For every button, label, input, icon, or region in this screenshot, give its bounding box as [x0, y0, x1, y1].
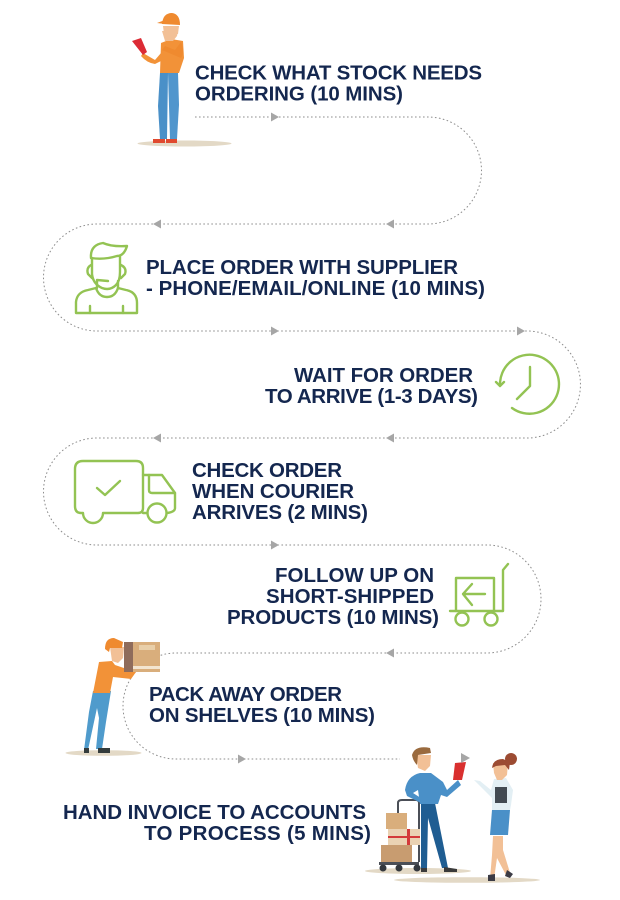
heading: step 2: [146, 256, 485, 300]
icon: worker with trolley and office colleague: [365, 747, 540, 883]
heading: step 5: PRODUCTS (10 MINS): [227, 606, 439, 629]
heading: step 3: WAIT FOR ORDER: [294, 364, 473, 387]
heading: step 2: PLACE ORDER WITH SUPPLIER: [146, 256, 458, 279]
heading: step 4: [192, 459, 368, 524]
heading: step 7: TO PROCESS (5 MINS): [144, 822, 371, 845]
heading: step 5: FOLLOW UP ON: [275, 564, 434, 587]
dotted process path: [43, 117, 580, 759]
icon: worker with clipboard: [132, 13, 232, 146]
heading: step 6: ON SHELVES (10 MINS): [149, 704, 375, 727]
heading: step 1: CHECK WHAT STOCK NEEDS: [195, 62, 482, 84]
heading: step 4: CHECK ORDER: [192, 459, 342, 482]
icon: cart with return arrow: [450, 564, 508, 626]
heading: step 1: [195, 62, 482, 106]
icon: delivery truck with tick: [75, 461, 175, 523]
heading: step 6: [149, 683, 375, 727]
heading: step 4: ARRIVES (2 MINS): [192, 501, 368, 524]
heading: step 6: PACK AWAY ORDER: [149, 683, 342, 706]
heading: step 5: [227, 564, 439, 629]
icon: clock with back arrow: [496, 355, 559, 414]
icon: support agent headset: [76, 243, 137, 313]
icon: worker carrying box: [66, 638, 160, 756]
heading: step 3: [265, 364, 478, 408]
heading: step 1: ORDERING (10 MINS): [195, 82, 403, 106]
heading: step 3: TO ARRIVE (1-3 DAYS): [265, 385, 478, 408]
arrowheads along path: [153, 112, 525, 764]
heading: step 5: SHORT-SHIPPED: [266, 585, 434, 608]
heading: step 7: [63, 801, 371, 845]
heading: step 4: WHEN COURIER: [192, 480, 354, 503]
heading: step 2: - PHONE/EMAIL/ONLINE (10 MINS): [146, 277, 485, 300]
heading: step 7: HAND INVOICE TO ACCOUNTS: [63, 801, 366, 824]
